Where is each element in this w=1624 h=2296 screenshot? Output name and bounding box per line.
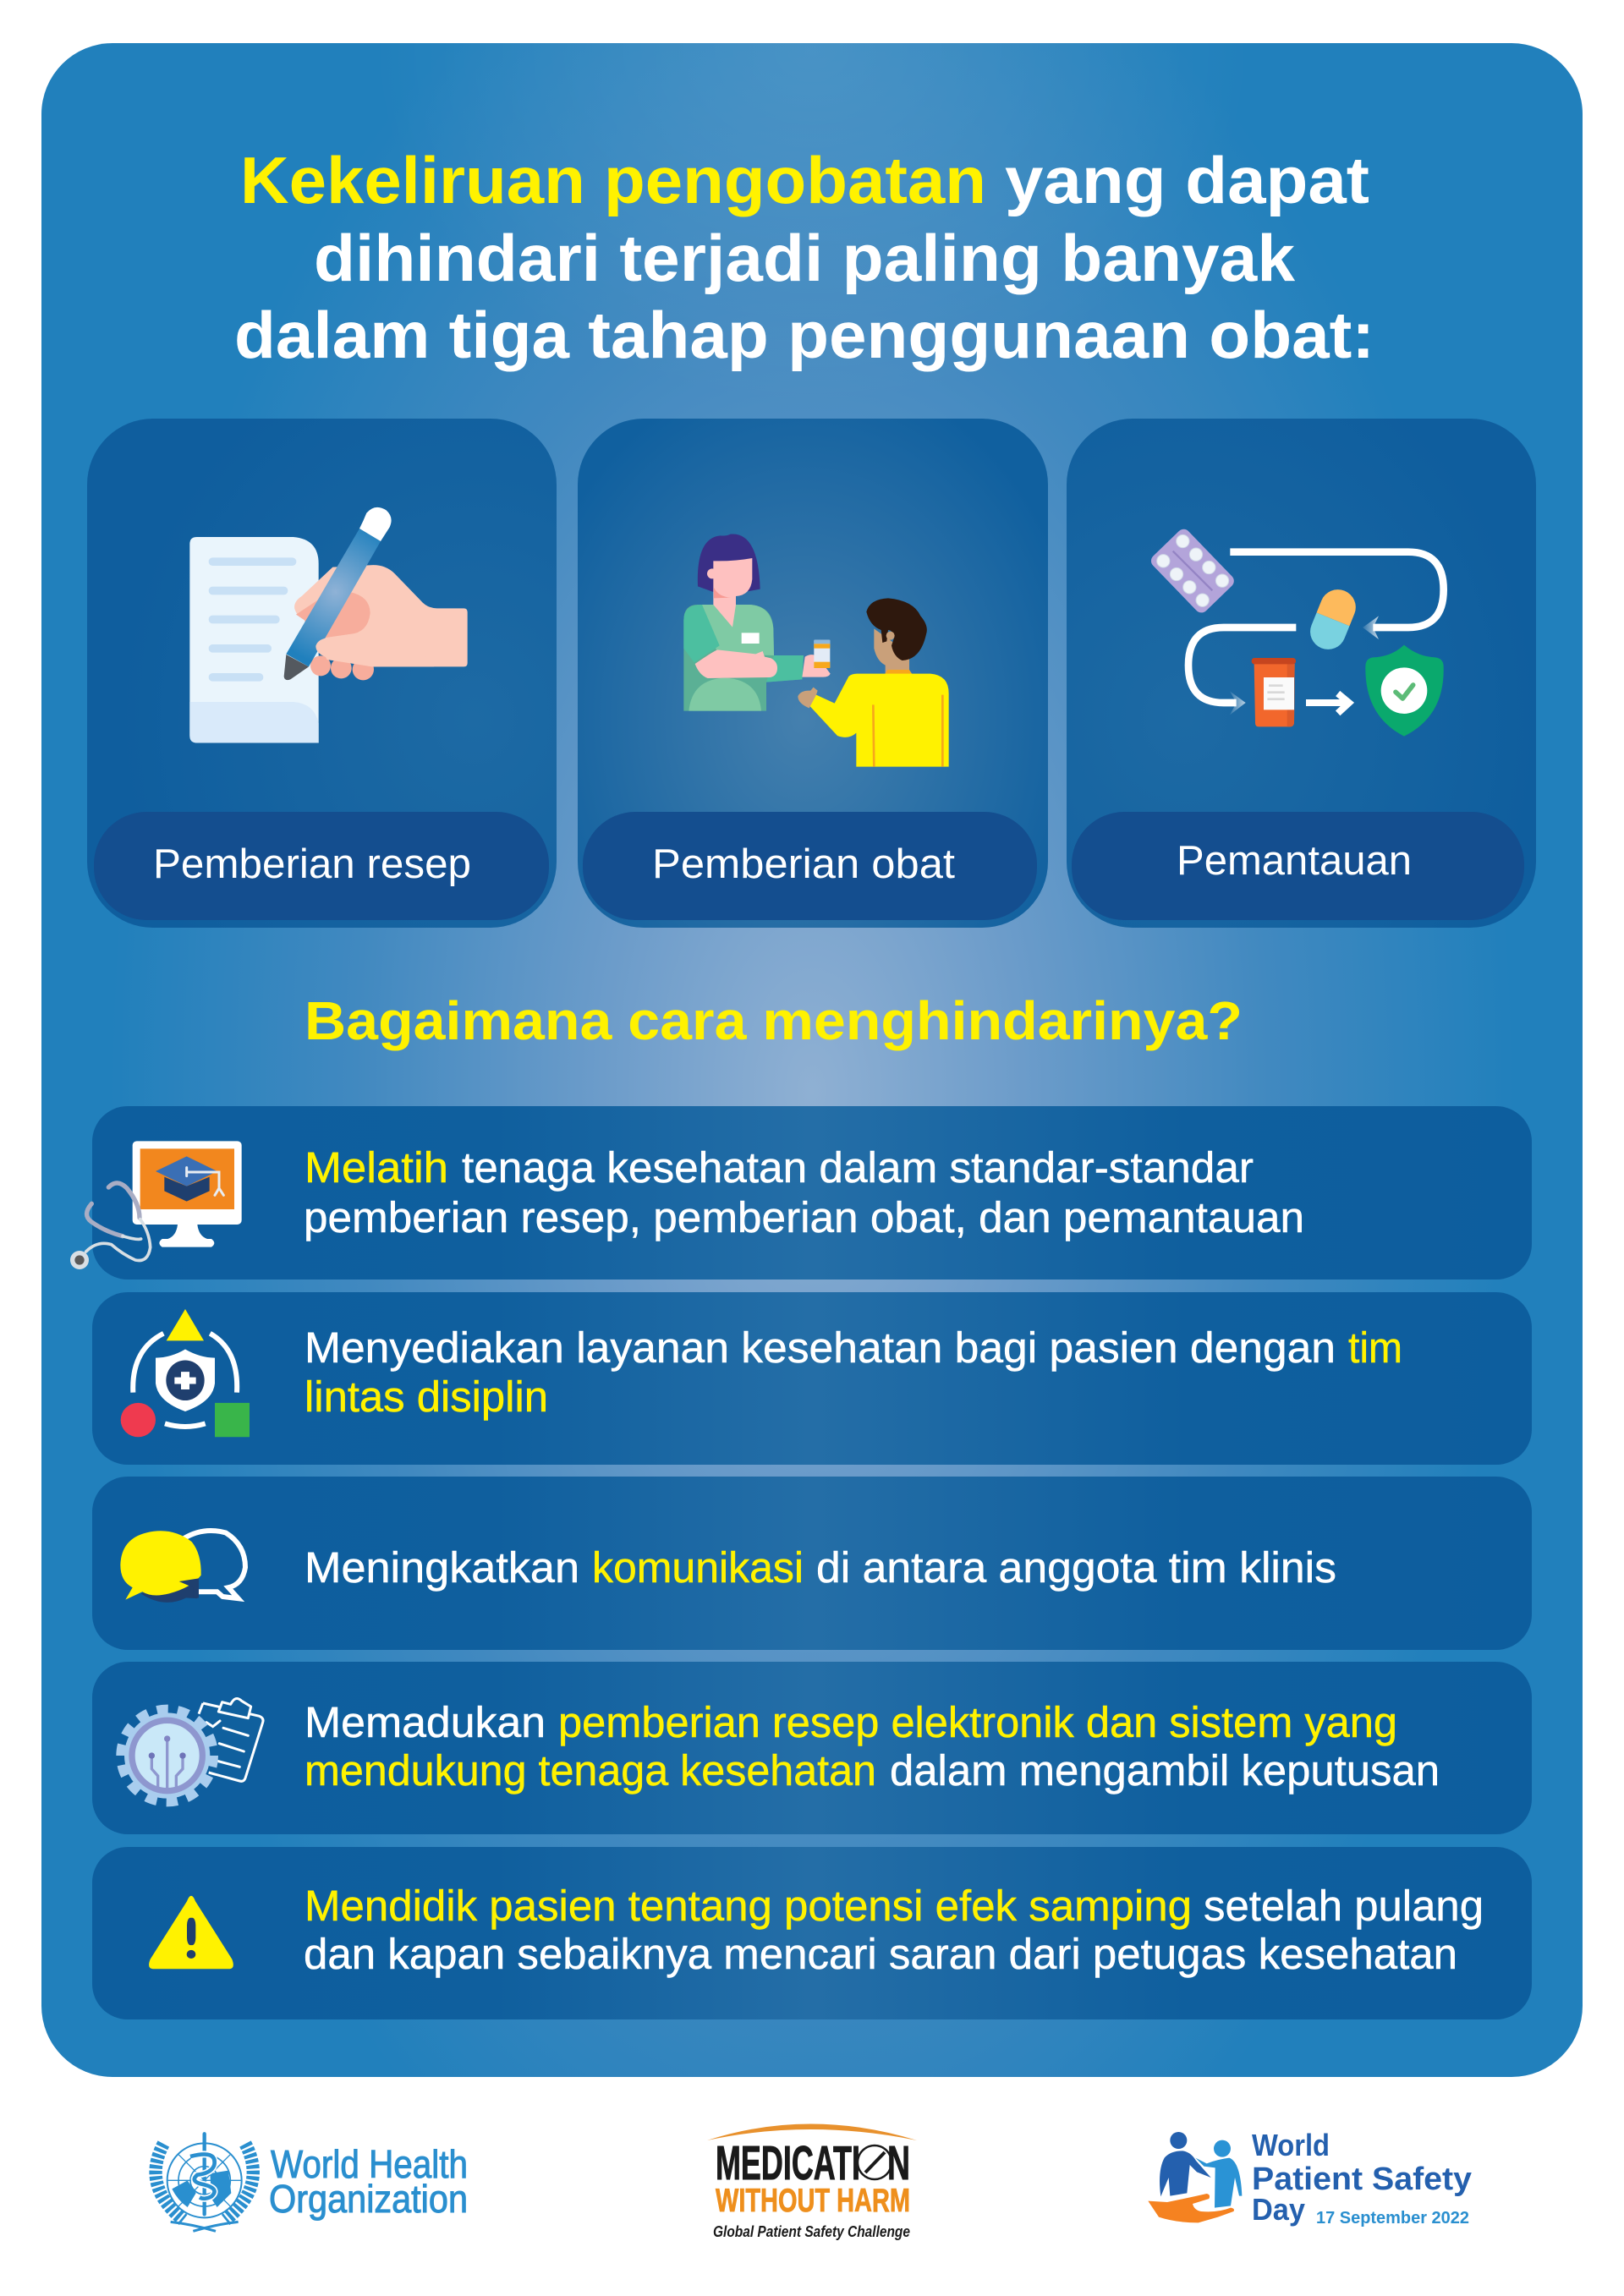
row: tim lintas disiplin [92, 1292, 1532, 1465]
panel: Pemantauan [1067, 419, 1536, 928]
title: Kekeliruan pengobatan [240, 143, 986, 217]
text: komunikasi [304, 1543, 1336, 1592]
text: Melatih [304, 1143, 1304, 1241]
logo: Medication Without Harm: Global Patient Safety Challenge [713, 2223, 910, 2240]
text: pemberian resep elektronik: Memadukan [304, 1698, 546, 1746]
title [234, 143, 1374, 372]
icon: warning triangle [149, 1896, 233, 1969]
text: efek samping [304, 1882, 1484, 1978]
text: Melatih: Melatih [304, 1143, 448, 1192]
logo: Medication Without Harm: N [887, 2136, 910, 2190]
text: tim lintas disiplin [304, 1323, 1402, 1421]
text: komunikasi: Meningkatkan [304, 1543, 579, 1592]
text: pemberian resep elektronik: pemberian resep elektronik dan sistem yang [558, 1698, 1397, 1746]
icon: training monitor and stethoscope [70, 1141, 242, 1269]
subheading: Bagaimana cara menghindarinya? [304, 990, 1243, 1051]
text: efek samping: Mendidik pasien tentang potensi efek samping [304, 1882, 1192, 1930]
icon: nurse giving medicine to patient [683, 534, 949, 767]
text: efek samping: setelah pulang [1204, 1882, 1484, 1930]
logo: Medication Without Harm: MEDICATI [716, 2136, 860, 2190]
icon: WHO emblem [156, 2134, 253, 2231]
label: Pemberian resep: Pemberian resep [153, 841, 471, 887]
icon: two figures and orange hand [1148, 2132, 1242, 2222]
panel: Pemberian resep [87, 419, 557, 928]
text: pemberian resep elektronik: dalam mengambil keputusan [890, 1746, 1440, 1795]
logo: World Patient Safety Day: 17 September 2022 [1316, 2209, 1469, 2228]
icon: hand writing on paper [189, 507, 468, 743]
text: tim lintas disiplin: lintas disiplin [304, 1373, 548, 1421]
logo: World Patient Safety Day: World [1252, 2128, 1330, 2162]
logo: World Patient Safety Day: Day [1252, 2192, 1305, 2227]
title: yang dapat [1005, 143, 1369, 217]
logo: World Patient Safety Day: Patient Safety [1252, 2162, 1472, 2197]
text: tim lintas disiplin: tim [1348, 1323, 1402, 1372]
text: komunikasi: di antara anggota tim klinis [816, 1543, 1336, 1592]
text: Melatih: tenaga kesehatan dalam standar-standar [462, 1143, 1254, 1192]
logo: World Health Organization: World Health [271, 2142, 468, 2186]
label: Pemberian resep [94, 812, 549, 920]
icon: multidisciplinary team shield [121, 1309, 250, 1437]
logo: World Health Organization [156, 2134, 468, 2231]
label: Pemantauan: Pemantauan [1177, 838, 1412, 884]
icon: speech bubbles [120, 1531, 245, 1603]
row: Melatih [70, 1106, 1532, 1280]
logo: Medication Without Harm: WITHOUT HARM [716, 2183, 910, 2219]
row: efek samping [92, 1847, 1532, 2019]
panel: Pemberian obat [578, 419, 1048, 928]
text: efek samping: dan kapan sebaiknya mencari saran dari petugas kesehatan [304, 1930, 1457, 1978]
logo: World Patient Safety Day [1148, 2128, 1472, 2228]
icon: medication monitoring cycle [1149, 526, 1444, 737]
text: pemberian resep elektronik [304, 1698, 1440, 1795]
text: komunikasi: komunikasi [592, 1543, 804, 1592]
row: pemberian resep elektronik [92, 1662, 1532, 1834]
text: Melatih: pemberian resep, pemberian obat, dan pemantauan [304, 1193, 1304, 1241]
label: Pemberian obat [583, 812, 1037, 920]
row: komunikasi [92, 1477, 1532, 1650]
label: Pemberian obat: Pemberian obat [652, 841, 955, 887]
title: dalam tiga tahap penggunaan obat: [234, 298, 1374, 372]
text: pemberian resep elektronik: mendukung tenaga kesehatan [304, 1746, 876, 1795]
logo: Medication Without Harm [707, 2124, 917, 2240]
icon: gear and clipboard [121, 1698, 263, 1802]
text: tim lintas disiplin: Menyediakan layanan kesehatan bagi pasien dengan [304, 1323, 1336, 1372]
title: dihindari terjadi paling banyak [314, 221, 1296, 295]
logo: World Health Organization: Organization [269, 2177, 468, 2221]
label: Pemantauan [1072, 812, 1524, 920]
